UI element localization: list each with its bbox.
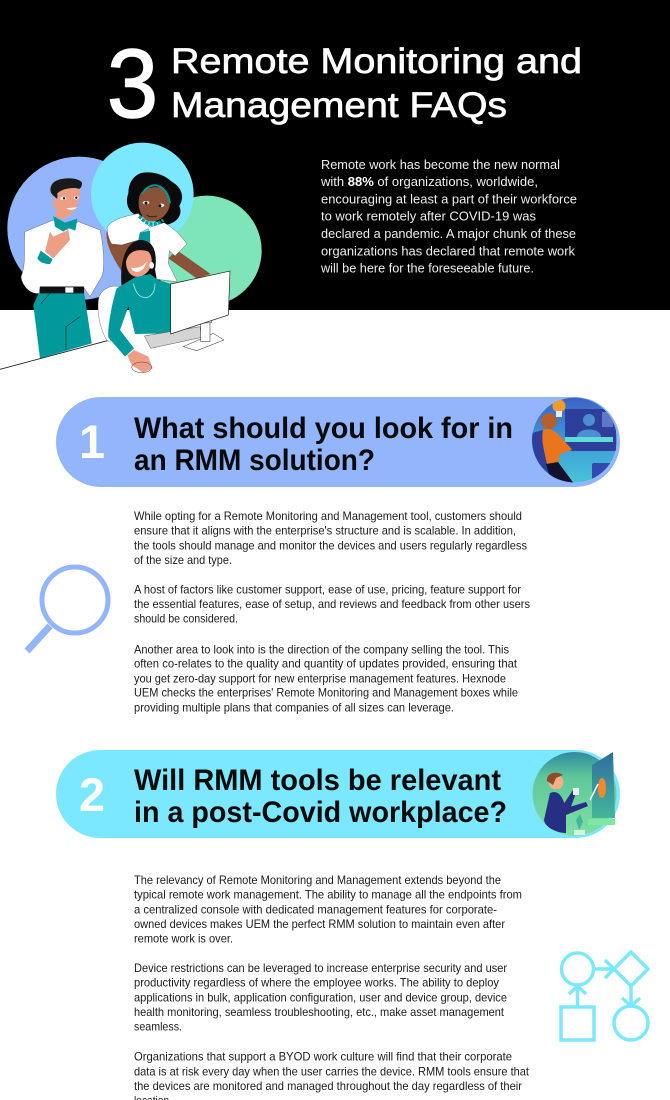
desk top xyxy=(0,330,250,380)
pill: question 2 xyxy=(56,750,620,838)
man standing xyxy=(21,178,104,358)
section 1 body text: the essential features, ease of setup, and reviews and feedback from other users xyxy=(134,598,530,611)
section 1 body text: the tools should manage and monitor the devices and users regularly regardless xyxy=(134,539,527,552)
section 2 body text: data is at risk every day when the user carries the device. RMM tools ensure that xyxy=(134,1065,530,1078)
section 2 body text: typical remote work management. The ability to manage all the endpoints from xyxy=(134,889,522,902)
green circle xyxy=(152,196,262,306)
intro text: organizations has declared that remote work xyxy=(321,243,575,258)
title xyxy=(107,29,582,138)
keyboard xyxy=(144,327,202,348)
number 1: 1 xyxy=(79,415,105,468)
icon: magnifying glass xyxy=(27,567,108,651)
cyan circle xyxy=(91,143,194,245)
man: pants xyxy=(33,292,92,358)
pill background xyxy=(56,750,620,838)
heading 1: What should you look for in xyxy=(134,412,513,445)
pill: question 1 xyxy=(56,397,620,487)
intro text: declared a pandemic. A major chunk of these xyxy=(321,226,576,241)
heading 2: in a post-Covid workplace? xyxy=(134,796,507,829)
section 1 body text: often co-relates to the quality and quantity of updates provided, ensuring that xyxy=(134,658,518,671)
chair back xyxy=(98,286,120,342)
section 1 body text: providing multiple plans that companies of all sizes can leverage. xyxy=(134,701,454,714)
heading 1: an RMM solution? xyxy=(134,444,375,477)
section 2 body text: seamless. xyxy=(134,1021,182,1034)
section 1 body text: UEM checks the enterprises' Remote Monitoring and Management boxes while xyxy=(134,687,518,700)
section 2 body text: owned devices makes UEM the perfect RMM solution to maintain even after xyxy=(134,918,505,931)
white desk area xyxy=(0,310,267,380)
title numeral: 3 xyxy=(107,29,158,138)
heading 1 xyxy=(134,412,513,477)
intro text: to work remotely after COVID-19 was xyxy=(321,209,536,224)
title line 1: Remote Monitoring and xyxy=(171,42,582,81)
heading 2 xyxy=(134,764,507,829)
icon: presenter at board xyxy=(532,752,616,836)
woman seated xyxy=(108,240,171,373)
section 2 body text: applications in bulk, application configuration, user and device group, device xyxy=(134,991,507,1004)
section 1 body text: A host of factors like customer support, ease of use, pricing, feature support for xyxy=(134,583,521,596)
section 1 body text: of the size and type. xyxy=(134,554,232,567)
icon: person at monitor xyxy=(532,398,617,485)
section 2 body text: Organizations that support a BYOD work culture will find that their corporate xyxy=(134,1051,512,1064)
illustration: team at a computer xyxy=(0,143,267,380)
icon: flowchart xyxy=(561,952,648,1040)
intro text: Remote work has become the new normal xyxy=(321,157,560,172)
section 1 body text: While opting for a Remote Monitoring and Management tool, customers should xyxy=(134,510,522,523)
section 2 body text: the devices are monitored and managed throughout the day regardless of their xyxy=(134,1080,522,1093)
section 2 body text: The relevancy of Remote Monitoring and Management extends beyond the xyxy=(134,874,501,887)
computer xyxy=(144,271,230,351)
intro text: encouraging at least a part of their workforce xyxy=(321,191,577,206)
section 1 body text: ensure that it aligns with the enterprise's structure and is scalable. In addition, xyxy=(134,525,516,538)
number 2: 2 xyxy=(79,768,105,821)
section 2 body text: remote work is over. xyxy=(134,933,233,946)
section 2 body text xyxy=(134,874,530,1100)
section 2 body text: Device restrictions can be leveraged to increase enterprise security and user xyxy=(134,962,507,975)
section 1 body text: Another area to look into is the direction of the company selling the tool. This xyxy=(134,643,509,656)
section 1 body text xyxy=(134,510,530,714)
intro text xyxy=(320,157,577,275)
header background xyxy=(0,0,670,310)
blue circle xyxy=(7,157,151,300)
section 1 body text: should be considered. xyxy=(134,613,238,626)
heading 2: Will RMM tools be relevant xyxy=(134,764,501,797)
pill background xyxy=(56,397,620,487)
title line 2: Management FAQs xyxy=(171,86,507,125)
intro text: with 88% of organizations, worldwide, xyxy=(320,174,538,189)
intro text: will be here for the foreseeable future. xyxy=(320,260,534,275)
woman standing xyxy=(106,172,211,282)
section 2 body text: a centralized console with dedicated management features for corporate- xyxy=(134,903,497,916)
section 2 body text: health monitoring, seamless troubleshooting, etc., make asset management xyxy=(134,1006,505,1019)
section 2 body text: productivity regardless of where the employee works. The ability to deploy xyxy=(134,977,499,990)
section 1 body text: you get zero-day support for new enterprise management features. Hexnode xyxy=(134,672,506,685)
